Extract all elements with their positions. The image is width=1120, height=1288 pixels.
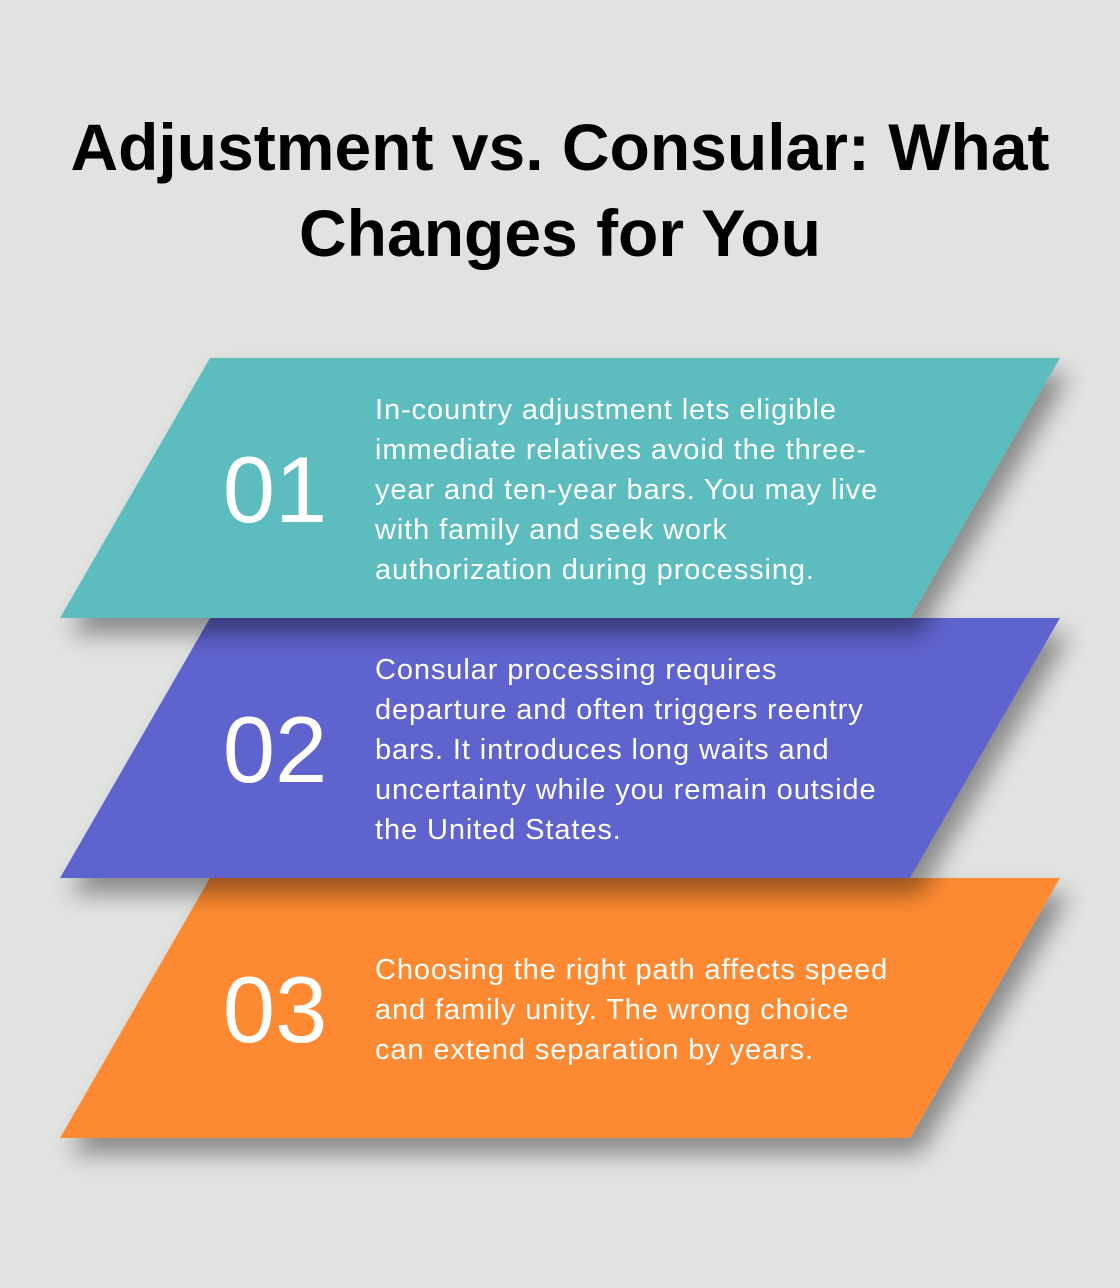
text 1: In-country adjustment lets eligible xyxy=(375,394,837,426)
title: Adjustment vs. Consular: What xyxy=(70,110,1050,184)
number 02: 02 xyxy=(223,697,327,802)
text 1: immediate relatives avoid the three- xyxy=(375,434,867,466)
text 2: bars. It introduces long waits and xyxy=(375,734,830,766)
text 1: year and ten-year bars. You may live xyxy=(375,474,878,506)
text 1: authorization during processing. xyxy=(375,554,815,586)
text 3 xyxy=(375,954,888,1066)
title: Changes for You xyxy=(299,196,821,270)
panel 1 shape xyxy=(60,358,1060,618)
text 3: and family unity. The wrong choice xyxy=(375,994,849,1026)
text 1: with family and seek work xyxy=(375,514,728,546)
panel 3 xyxy=(223,954,888,1066)
text 2: departure and often triggers reentry xyxy=(375,694,864,726)
number 03: 03 xyxy=(223,957,327,1062)
panel 3 shape xyxy=(60,878,1060,1138)
panel 2 shape xyxy=(60,618,1060,878)
panel 2 xyxy=(223,654,876,846)
panel 1 xyxy=(223,394,878,586)
text 3: Choosing the right path affects speed xyxy=(375,954,888,986)
text 2: Consular processing requires xyxy=(375,654,777,686)
number 01: 01 xyxy=(223,437,327,542)
text 2: uncertainty while you remain outside xyxy=(375,774,876,806)
text 2 xyxy=(375,654,876,846)
text 2: the United States. xyxy=(375,814,622,846)
title xyxy=(70,110,1050,270)
text 3: can extend separation by years. xyxy=(375,1034,814,1066)
text 1 xyxy=(375,394,878,586)
